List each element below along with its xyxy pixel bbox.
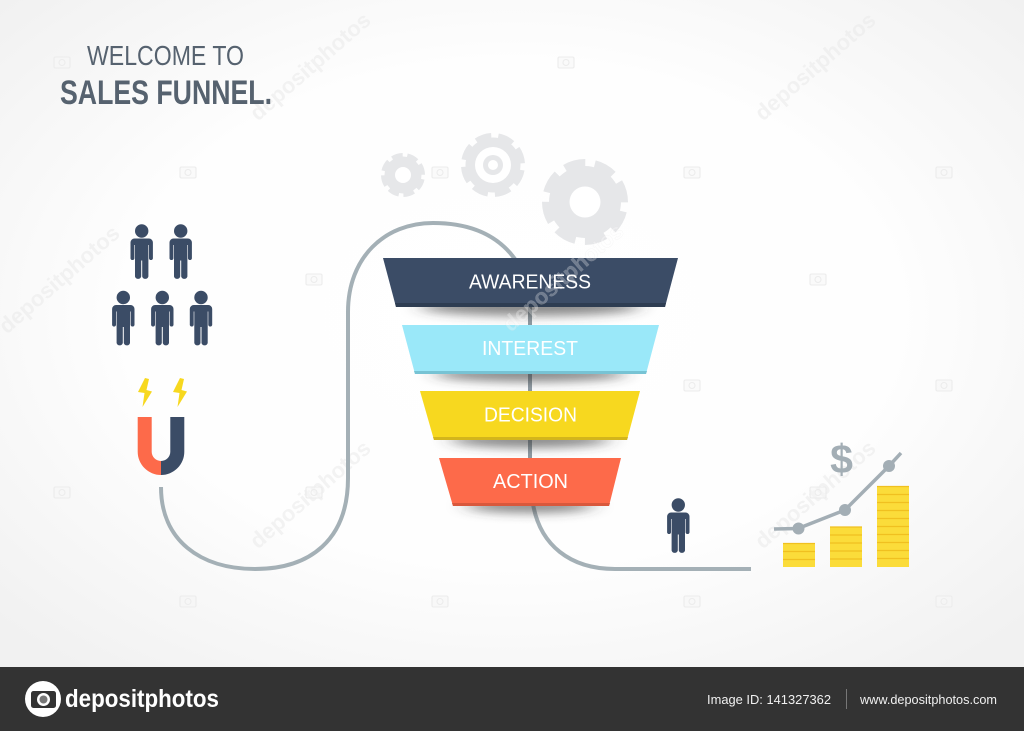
stock watermarks: depositphotos	[750, 435, 880, 553]
footer divider	[846, 689, 847, 709]
stock watermarks: depositphotos	[245, 435, 375, 553]
pipeline: through funnel	[528, 300, 532, 460]
stock watermarks: depositphotos	[245, 7, 375, 125]
icon: magnet	[138, 417, 184, 475]
bar: tall coin stack	[877, 486, 909, 567]
icon: gears	[380, 132, 631, 248]
icon: large gear	[539, 156, 631, 248]
funnel stage: decision: DECISION	[484, 404, 577, 427]
icon: medium gear	[460, 132, 526, 198]
footer logo icon	[25, 681, 61, 717]
funnel stage: interest	[402, 325, 659, 374]
funnel stage: action	[439, 458, 621, 506]
title	[60, 40, 272, 112]
title line: sales funnel: SALES FUNNEL.	[60, 74, 272, 112]
funnel stage: action: ACTION	[493, 470, 568, 493]
icon: lightning bolts	[138, 378, 187, 407]
pipeline: from magnet to funnel	[161, 223, 517, 569]
stock watermarks: depositphotos	[750, 7, 880, 125]
funnel shadows	[420, 298, 640, 513]
watermark over funnel: depositphotos	[498, 218, 628, 336]
funnel stage: awareness	[383, 258, 678, 307]
title line: welcome to: WELCOME TO	[87, 40, 244, 71]
pipeline: funnel to customer	[533, 504, 751, 569]
website url: www.depositphotos.com	[859, 693, 997, 707]
stock watermarks	[0, 7, 952, 607]
icon: group of people	[112, 224, 212, 345]
image id: Image ID: 141327362	[707, 693, 831, 707]
growth chart	[774, 436, 909, 567]
footer bar	[0, 667, 1024, 731]
bar: medium coin stack	[830, 526, 862, 567]
funnel	[383, 258, 678, 506]
footer logo wordmark: depositphotos	[65, 685, 219, 713]
icon: customer	[667, 498, 690, 553]
icon: small gear	[380, 152, 426, 198]
funnel stage: interest: INTEREST	[482, 337, 578, 360]
funnel stage: awareness: AWARENESS	[469, 270, 591, 293]
icon: dollar sign: $	[830, 436, 853, 482]
bar: short coin stack	[783, 543, 815, 567]
trend line	[774, 453, 901, 534]
funnel stage: decision	[420, 391, 640, 440]
